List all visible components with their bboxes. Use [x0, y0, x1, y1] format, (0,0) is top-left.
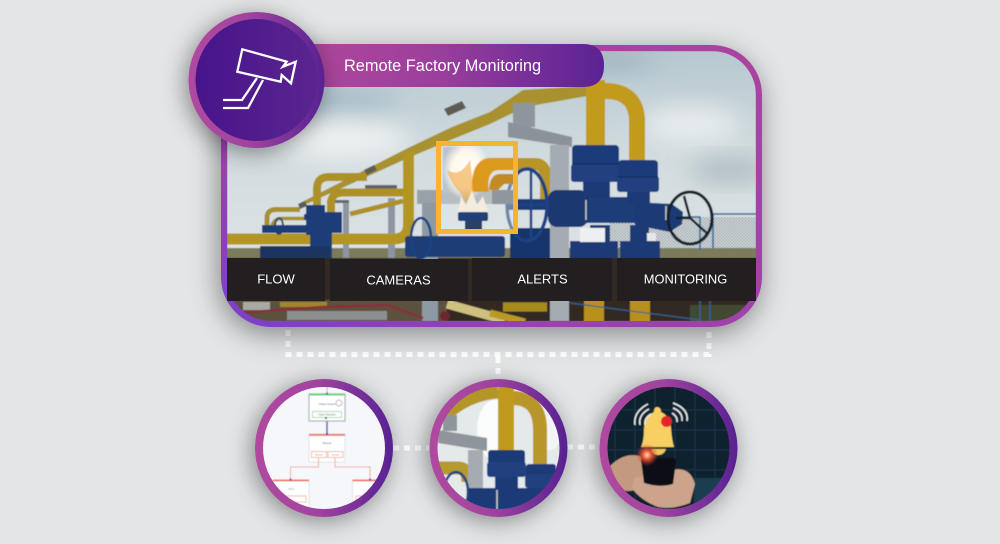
pipes	[438, 385, 540, 482]
main yellow pipe	[227, 152, 408, 239]
button: ALERTS	[472, 258, 612, 301]
button: FLOW: FLOW	[257, 272, 296, 286]
near yellow pipes	[280, 80, 640, 322]
circle: flow diagram	[255, 379, 393, 518]
card frame	[221, 45, 762, 327]
node: resnet	[309, 433, 345, 462]
highlight box	[438, 144, 516, 232]
phone glow	[636, 444, 658, 466]
bell	[641, 407, 674, 455]
heading banner	[300, 44, 604, 87]
button: FLOW	[227, 258, 325, 301]
steel frames rear	[327, 185, 397, 258]
node: resnet: Resnet	[316, 454, 323, 456]
node: object detect	[309, 392, 345, 421]
lower pipes	[237, 305, 423, 318]
node: object detect: Object Detection	[318, 414, 336, 416]
dotted connectors	[288, 327, 709, 448]
far valves	[260, 205, 342, 258]
button: CAMERAS: CAMERAS	[366, 272, 431, 288]
button: CAMERAS	[330, 259, 468, 301]
steel bracket	[438, 415, 487, 492]
button: MONITORING: MONITORING	[644, 272, 727, 286]
hands	[610, 455, 695, 508]
phone	[641, 458, 676, 486]
factory pipeline photo	[227, 48, 770, 322]
heading banner: Remote Factory Monitoring	[344, 57, 541, 75]
node: resnet: Resnet	[323, 441, 332, 445]
steel frames front	[243, 103, 572, 321]
node: object detect: Object Detect	[319, 402, 336, 406]
distant fence	[610, 214, 756, 321]
button: ALERTS: ALERTS	[517, 272, 568, 286]
main valve tree	[405, 145, 683, 258]
far yellow pipes	[267, 210, 307, 230]
node: lower right	[352, 478, 376, 502]
button: MONITORING	[617, 258, 756, 301]
node: resnet: Resnet	[332, 454, 339, 456]
arch pipes	[317, 177, 404, 214]
wifi waves	[635, 403, 687, 425]
icon: security camera badge	[188, 12, 324, 148]
panel: factory photo card	[221, 45, 770, 327]
fire on valve	[439, 140, 515, 231]
circle: phone alert	[600, 379, 738, 517]
clamps	[298, 101, 466, 209]
diagonal long pipe	[300, 86, 587, 207]
blue valves	[468, 450, 558, 512]
notification dot	[661, 416, 672, 427]
node: lower left: YLO	[288, 487, 295, 491]
circle: pipeline close-up	[430, 379, 568, 517]
valve wheels	[411, 169, 712, 258]
